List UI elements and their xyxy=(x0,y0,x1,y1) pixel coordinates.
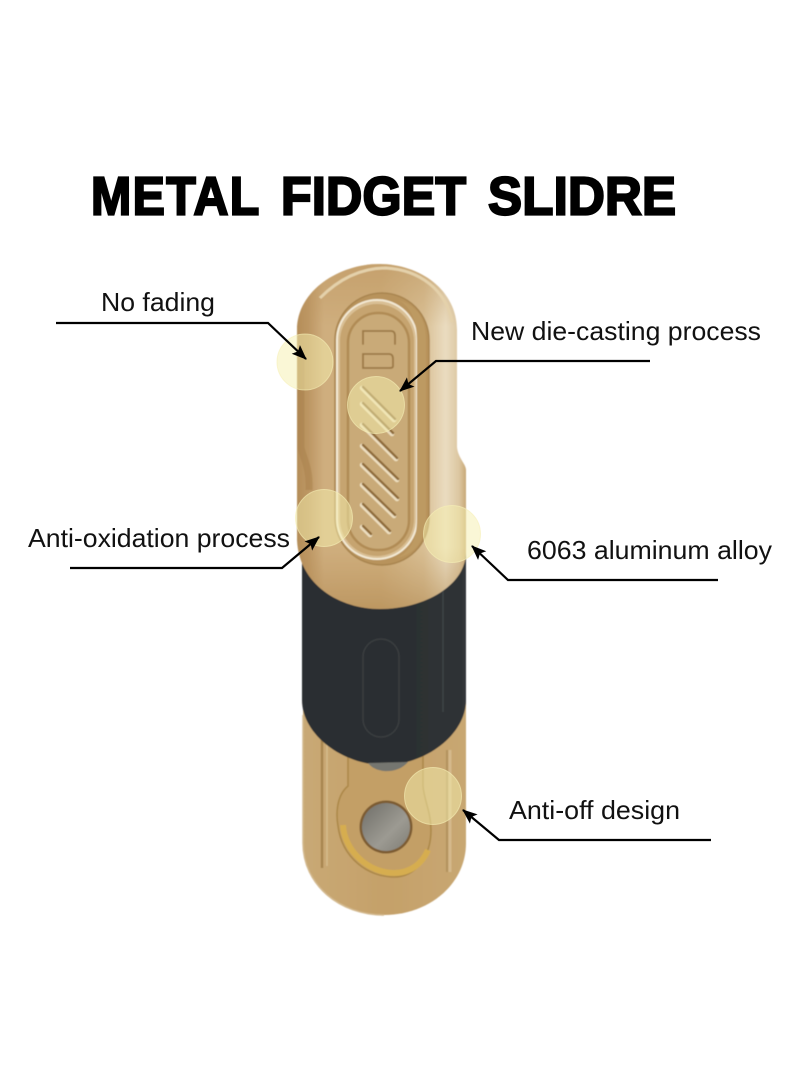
title: SLIDRE xyxy=(488,166,676,227)
title xyxy=(91,166,676,227)
callout: anti-oxidation process xyxy=(28,523,319,568)
callout: new die-casting process xyxy=(400,316,761,391)
black slider xyxy=(302,550,466,771)
callout: no fading: No fading xyxy=(101,287,215,317)
title: FIDGET xyxy=(281,167,466,227)
callout: anti-oxidation process: Anti-oxidation process xyxy=(28,523,290,553)
product: metal fidget slider xyxy=(297,264,466,915)
callout: anti-off design: Anti-off design xyxy=(509,795,680,825)
recessed stadium xyxy=(335,293,429,565)
callout: no fading xyxy=(56,287,306,359)
title: METAL xyxy=(91,166,259,226)
inner panel xyxy=(348,313,409,550)
callout: 6063 aluminum alloy xyxy=(472,535,772,580)
callout: new die-casting process: New die-casting process xyxy=(471,316,761,346)
embossed marks xyxy=(363,331,395,368)
lower gold plate xyxy=(303,700,466,915)
gold top cap xyxy=(297,264,466,609)
callout: anti-off design xyxy=(463,795,711,840)
highlight circles xyxy=(277,334,480,824)
rivet xyxy=(360,800,412,854)
callout: 6063 aluminum alloy: 6063 aluminum alloy xyxy=(527,535,772,565)
diagonal grooves xyxy=(362,387,398,535)
